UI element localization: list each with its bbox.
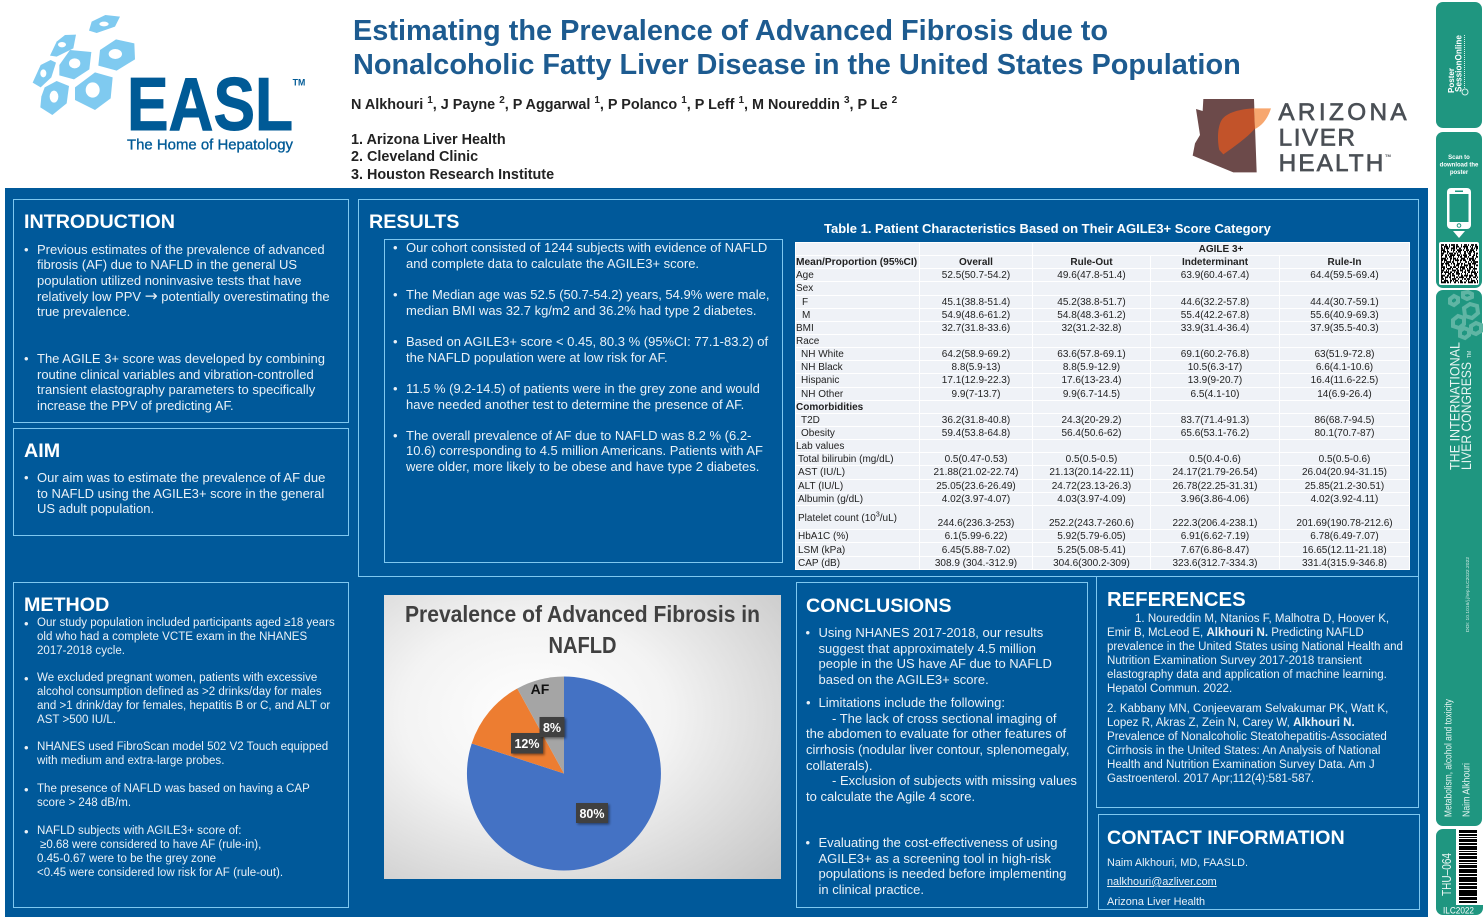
heading: contact information: CONTACT INFORMATION (1107, 827, 1345, 849)
congress name: THE INTERNATIONAL (1448, 342, 1462, 470)
table: patient characteristics: 5.92(5.79-6.05) (1057, 531, 1126, 542)
panel: method: • (24, 671, 29, 686)
bullet text: study population: old who had a complete VCTE exam in the NHANES (37, 631, 307, 643)
bullet text: limitations: - The lack of cross sectional imaging of (832, 711, 1056, 726)
table: patient characteristics: 0.5(0.4-0.6) (1189, 454, 1241, 465)
table: patient characteristics: 16.4(11.6-22.5) (1311, 375, 1378, 386)
bullet text: overall prevalence (393, 428, 763, 474)
logo text: Arizona: ARIZONA (1278, 99, 1407, 126)
bullet text: exclusions: and >1 drink/day for females, hepatitis B or C, and ALT or (37, 700, 330, 712)
reference 1 (1107, 613, 1403, 695)
panel: method: • (24, 824, 29, 839)
bullet text: CAP definition (24, 782, 310, 809)
congress name (1448, 342, 1474, 470)
table: patient characteristics: 83.7(71.4-91.3) (1181, 415, 1249, 426)
bullet text: limitations: • (806, 695, 811, 710)
panel: aim (13, 428, 349, 536)
data label: 8% (540, 717, 564, 737)
bullet text: AGILE 3+ development (24, 351, 325, 413)
table: patient characteristics: 65.6(53.1-76.2) (1181, 428, 1249, 439)
data label: 12% (511, 733, 543, 754)
table: patient characteristics: AST (IU/L) (798, 467, 845, 478)
bullet text: limitations: Limitations include the following: (818, 695, 1005, 710)
table: patient characteristics: 26.78(22.25-31.31) (1172, 481, 1258, 492)
panel: results findings box (384, 239, 783, 563)
presenter: Naim Alkhouri (1462, 763, 1472, 817)
sidebar (1436, 2, 1483, 916)
table: patient characteristics: 49.6(47.8-51.4) (1057, 270, 1126, 281)
table: patient characteristics: 4.02(3.97-4.07) (942, 494, 1010, 505)
table: patient characteristics: 26.04(20.94-31.15) (1302, 467, 1387, 478)
table: patient characteristics: Total bilirubin (mg/dL) (798, 454, 894, 465)
table: patient characteristics: NH White (801, 349, 844, 360)
table: patient characteristics: 32(31.2-32.8) (1061, 323, 1122, 334)
table: patient characteristics: F (802, 297, 808, 308)
bullet text: demographics: The Median age was 52.5 (50.7-54.2) years, 54.9% were male, (406, 287, 769, 302)
table: patient characteristics: 25.05(23.6-26.49) (936, 481, 1016, 492)
reference 1: Nutrition Examination Survey 2017-2018 transient (1107, 655, 1362, 667)
table: patient characteristics: 304.6(300.2-309) (1053, 558, 1130, 569)
reference 1: prevalence in the United States using National Health and (1107, 641, 1403, 653)
table: patient characteristics: 6.91(6.62-7.19) (1181, 531, 1249, 542)
table: patient characteristics: ALT (IU/L) (798, 481, 843, 492)
icon: liver (1218, 108, 1271, 154)
reference 2: Gastroenterol. 2017 Apr;112(4):581-587. (1107, 772, 1314, 784)
bullet text: AGILE3+ cutoffs: ≥0.68 were considered to have AF (rule-in), (40, 839, 261, 851)
contact email: nalkhouri@azliver.com (1107, 876, 1217, 888)
table: patient characteristics: 3.96(3.86-4.06) (1181, 494, 1249, 505)
table: patient characteristics: Indeterminant (1182, 257, 1248, 268)
bullet text: AGILE3+ cutoffs: 0.45-0.67 were to be the grey zone (37, 853, 216, 865)
chart title: NAFLD (548, 632, 616, 658)
table: patient characteristics: 6.5(4.1-10) (1191, 389, 1239, 400)
heading: results: RESULTS (369, 211, 459, 233)
table: patient characteristics: T2D (801, 415, 820, 426)
session topic: Metabolism, alcohol and toxicity (1444, 699, 1454, 817)
bullet text: exclusions: We excluded pregnant women, patients with excessive (37, 672, 317, 684)
table: patient characteristics: 59.4(53.8-64.8) (942, 428, 1010, 439)
bullet text: cost-effectiveness (806, 835, 1066, 897)
table: patient characteristics: 17.1(12.9-22.3) (942, 375, 1010, 386)
bullet text: AGILE3+ cutoffs: <0.45 were considered low risk for AF (rule-out). (37, 867, 283, 879)
bullet text: AGILE 3+ development: increase the PPV of predicting AF. (37, 398, 234, 413)
panel: results findings box: • (393, 240, 398, 255)
congress name: TM (1467, 351, 1473, 358)
bullet text: cohort: and complete data to calculate the AGILE3+ score. (406, 256, 699, 271)
congress name: LIVER CONGRESS (1459, 362, 1474, 470)
data label: 8%: 8% (543, 721, 561, 735)
reference 1: Hepatol Commun. 2022. (1107, 683, 1232, 695)
data label: 80% (576, 803, 608, 823)
table: patient characteristics: 63.6(57.8-69.1) (1057, 349, 1126, 360)
panel: results findings box: • (393, 287, 398, 302)
barcode (1459, 830, 1477, 904)
panel: introduction (13, 199, 349, 423)
table: patient characteristics: 45.2(38.8-51.7) (1057, 297, 1126, 308)
table: patient characteristics: 21.88(21.02-22.74) (933, 467, 1019, 478)
panel: results findings box: • (393, 381, 398, 396)
reference 2: Health and Nutrition Examination Survey Data. Am J (1107, 758, 1375, 770)
panel: method: • (24, 740, 29, 755)
table: patient characteristics: 64.4(59.5-69.4) (1310, 270, 1379, 281)
table: patient characteristics: 16.65(12.11-21.18) (1302, 545, 1387, 556)
contact name: Naim Alkhouri, MD, FAASLD. (1107, 857, 1248, 869)
table: patient characteristics: 54.8(48.3-61.2) (1057, 310, 1126, 321)
bullet text: exclusions (24, 671, 330, 726)
table: patient characteristics: 7.67(6.86-8.47) (1181, 545, 1249, 556)
panel: references (1096, 576, 1419, 808)
table: patient characteristics: 64.2(58.9-69.2) (942, 349, 1010, 360)
bullet text: cohort: Our cohort consisted of 1244 subjects with evidence of NAFLD (406, 240, 767, 255)
table: patient characteristics: 21.13(20.14-22.11) (1049, 467, 1134, 478)
table: patient characteristics: 36.2(31.8-40.8) (942, 415, 1010, 426)
table: patient characteristics: 6.78(6.49-7.07) (1310, 531, 1379, 542)
panel: introduction: • (24, 351, 29, 366)
data label: 80%: 80% (579, 807, 605, 821)
bullet text: study population (24, 616, 335, 657)
bullet text: prior estimates: relatively low PPV → potentially overestimating the (37, 287, 330, 305)
bullet text: prior estimates: fibrosis (AF) due to NAFLD in the general US (37, 257, 297, 272)
table: patient characteristics: Mean/Proportion (95%CI) (796, 257, 917, 268)
bullet text: low risk: Based on AGILE3+ score < 0.45, 80.3 % (95%CI: 77.1-83.2) of (406, 334, 768, 349)
table: patient characteristics: 4.02(3.92-4.11) (1311, 494, 1378, 505)
heading: conclusions: CONCLUSIONS (806, 595, 951, 617)
trademark: TM (293, 77, 305, 87)
scan caption: poster (1450, 170, 1469, 176)
bullet text: main finding: people in the US have AF due to NAFLD (818, 656, 1052, 671)
bullet text: exclusions: AST >500 IU/L. (37, 714, 116, 726)
bullet text: grey zone (393, 381, 760, 412)
bullet text: CAP definition: The presence of NAFLD was based on having a CAP (37, 783, 310, 795)
table: patient characteristics: 52.5(50.7-54.2) (942, 270, 1010, 281)
table: patient characteristics: Lab values (796, 441, 844, 452)
table: patient characteristics: 201.69(190.78-212.6) (1296, 518, 1393, 529)
tagline: The Home of Hepatology (127, 137, 294, 153)
table: patient characteristics: 10.5(6.3-17) (1188, 362, 1242, 373)
bullet text: limitations: collaterals). (806, 758, 872, 773)
poster ID: THU–064 (1440, 853, 1454, 896)
panel: results findings box: • (393, 334, 398, 349)
bullet text: grey zone: 11.5 % (9.2-14.5) of patients were in the grey zone and would (406, 381, 760, 396)
bullet text: main finding: suggest that approximately 4.5 million (818, 641, 1036, 656)
table: patient characteristics: Obesity (801, 428, 835, 439)
reference 2: 2. Kabbany MN, Conjeevaram Selvakumar PK, Watt K, (1107, 702, 1388, 714)
sidebar: congress block (1436, 290, 1482, 826)
table: patient characteristics: 331.4(315.9-346.8) (1302, 558, 1387, 569)
table: patient characteristics: BMI (796, 323, 814, 334)
bullet text: CAP definition: score > 248 dB/m. (37, 797, 131, 809)
table: patient characteristics: 69.1(60.2-76.8) (1181, 349, 1249, 360)
bullet text: FibroScan (24, 740, 328, 767)
bullet text: AGILE 3+ development: transient elastography parameters to specifically (37, 382, 315, 397)
table: patient characteristics (795, 242, 1410, 570)
bullet text: AGILE3+ cutoffs: NAFLD subjects with AGILE3+ score of: (37, 825, 241, 837)
pie slices (467, 676, 661, 870)
logo text: Health: HEALTH (1279, 150, 1383, 177)
table: patient characteristics: 33.9(31.4-36.4) (1181, 323, 1249, 334)
table: patient characteristics: 323.6(312.7-334.3) (1172, 558, 1258, 569)
table: patient characteristics: 54.9(48.6-61.2) (942, 310, 1010, 321)
table: patient characteristics: 37.9(35.5-40.3) (1310, 323, 1379, 334)
table: patient characteristics: 63.9(60.4-67.4) (1181, 270, 1249, 281)
table: patient characteristics: 6.45(5.88-7.02) (942, 545, 1010, 556)
Arizona Liver Health logo (1192, 99, 1407, 177)
congress code: ILC2022 (1443, 906, 1474, 916)
bullet text: cost-effectiveness: in clinical practice. (818, 882, 924, 897)
scan caption (1440, 155, 1479, 176)
table: patient characteristics: Age (796, 270, 814, 281)
table: patient characteristics: 55.6(40.9-69.3) (1310, 310, 1379, 321)
table: patient characteristics: 32.7(31.8-33.6) (942, 323, 1010, 334)
bullet text: grey zone: have needed another test to determine the presence of AF. (406, 397, 744, 412)
icon: down arrow (1453, 231, 1465, 238)
bullet text: limitations: cirrhosis (nodular liver contour, splenomegaly, (806, 742, 1070, 757)
sidebar: poster session block: Poster (1446, 67, 1456, 93)
bullet text: main finding (806, 625, 1052, 687)
table: patient characteristics: 9.9(6.7-14.5) (1063, 389, 1120, 400)
panel: conclusions: • (806, 625, 810, 640)
hexagon watermark (1450, 292, 1481, 338)
affiliations: 3. Houston Research Institute (351, 166, 554, 182)
table: patient characteristics: 4.03(3.97-4.09) (1057, 494, 1126, 505)
panel: method: • (24, 782, 29, 797)
reference 1: Emir B, McLeod E, Alkhouri N. Predicting NAFLD (1107, 627, 1364, 639)
bullet text: FibroScan: NHANES used FibroScan model 502 V2 Touch equipped (37, 741, 328, 753)
table: patient characteristics: 8.8(5.9-12.9) (1063, 362, 1120, 373)
panel: method: • (24, 616, 29, 631)
panel: results (358, 199, 1419, 577)
reference 2: Lopez R, Akras Z, Zein N, Carey W, Alkhouri N. (1107, 716, 1355, 728)
table: patient characteristics: NH Other (801, 389, 843, 400)
table: patient characteristics: CAP (dB) (798, 558, 840, 569)
data label: 12%: 12% (514, 737, 540, 751)
bullet text: overall prevalence: were older, more likely to be obese and have type 2 diabetes. (406, 459, 759, 474)
table: patient characteristics: 55.4(42.2-67.8) (1181, 310, 1249, 321)
label: AF: AF (531, 681, 550, 697)
table: patient characteristics: 9.9(7-13.7) (952, 389, 1000, 400)
table: patient characteristics: Hispanic (801, 375, 839, 386)
table: patient characteristics: Comorbidities (796, 402, 863, 413)
table: patient characteristics: Rule-In (1328, 257, 1361, 268)
bullet text: aim: Our aim was to estimate the prevalence of AF due (37, 470, 325, 485)
table: patient characteristics: 0.5(0.47-0.53) (945, 454, 1007, 465)
bullet text: low risk: the NAFLD population were at low risk for AF. (406, 350, 668, 365)
table: patient characteristics: 8.8(5.9-13) (952, 362, 1000, 373)
table: patient characteristics: 24.3(20-29.2) (1061, 415, 1122, 426)
scan caption: Scan to (1448, 155, 1470, 161)
panel: results findings box: • (393, 428, 398, 442)
bullet text: aim: US adult population. (37, 501, 154, 516)
table: patient characteristics: Platelet count (103/uL) (798, 511, 897, 524)
table: patient characteristics: NH Black (801, 362, 843, 373)
bullet text: study population: Our study population included participants aged ≥18 years (37, 617, 335, 629)
table: patient characteristics: 252.2(243.7-260.6) (1049, 518, 1134, 529)
wordmark: EASL: EASL (127, 62, 293, 146)
affiliations: 2. Cleveland Clinic (351, 149, 478, 165)
bullet text: overall prevalence: 10.6) corresponding to 4.5 million Americans. Patients with AF (406, 443, 763, 458)
heading: introduction: INTRODUCTION (24, 211, 175, 233)
bullet text: cost-effectiveness: Evaluating the cost-effectiveness of using (818, 835, 1057, 850)
panel: method (13, 582, 349, 908)
bullet text: AGILE 3+ development: routine clinical variables and vibration-controlled (37, 367, 314, 382)
main blue background panel (5, 188, 1428, 917)
bullet text: aim: to NAFLD using the AGILE3+ score in the general (37, 486, 324, 501)
sidebar: poster session block (1436, 2, 1482, 128)
table: patient characteristics: 24.17(21.79-26.54) (1172, 467, 1258, 478)
bullet text: limitations (806, 695, 1077, 804)
table: patient characteristics: 308.9 (304.-312.9) (935, 558, 1017, 569)
table: patient characteristics: 13.9(9-20.7) (1188, 375, 1242, 386)
QR code (1439, 242, 1479, 285)
icon: phone (1447, 188, 1471, 229)
table: patient characteristics: M (802, 310, 810, 321)
bullet text: aim (24, 470, 325, 516)
chart title (405, 601, 760, 658)
bullet text: demographics (393, 287, 769, 318)
table: patient characteristics: 44.6(32.2-57.8) (1181, 297, 1249, 308)
table: patient characteristics: 0.5(0.5-0.6) (1319, 454, 1370, 465)
panel: contact information (1098, 814, 1420, 910)
logo text: Liver: LIVER (1279, 125, 1355, 152)
reference 2: Prevalence of Nonalcoholic Steatohepatitis-Associated (1107, 730, 1387, 742)
bullet text: AGILE3+ cutoffs (24, 824, 283, 879)
table: patient characteristics: Rule-Out (1070, 257, 1113, 268)
sidebar: QR download block (1436, 132, 1482, 288)
EASL logo (32, 15, 305, 153)
affiliations: 1. Arizona Liver Health (351, 132, 506, 148)
bullet text: prior estimates: population utilized noninvasive tests that have (37, 273, 302, 288)
table: patient characteristics: 14(6.9-26.4) (1317, 389, 1372, 400)
bullet text: prior estimates: true prevalence. (37, 304, 130, 319)
bullet text: low risk (393, 334, 768, 365)
table: patient characteristics: 244.6(236.3-253) (938, 518, 1014, 529)
table: patient characteristics: 222.3(206.4-238.1) (1172, 518, 1258, 529)
contact organisation: Arizona Liver Health (1107, 896, 1205, 908)
bullet text: limitations: - Exclusion of subjects with missing values (832, 773, 1077, 788)
panel: conclusions (796, 582, 1088, 908)
bullet text: exclusions: alcohol consumption defined as >2 drinks/day for males (37, 686, 322, 698)
table: patient characteristics: 5.25(5.08-5.41) (1057, 545, 1126, 556)
bullet text: cost-effectiveness: AGILE3+ as a screening tool in high-risk (818, 851, 1051, 866)
bullet text: cohort (393, 240, 767, 271)
reference 2 (1107, 702, 1388, 784)
table: patient characteristics: 25.85(21.2-30.51) (1305, 481, 1384, 492)
table: patient characteristics: AGILE 3+ (1199, 244, 1243, 255)
bullet text: prior estimates: Previous estimates of the prevalence of advanced (37, 242, 325, 257)
reference 1: elastography data and application of machine learning. (1107, 669, 1387, 681)
panel: introduction: • (24, 242, 29, 257)
bullet text: main finding: based on the AGILE3+ score. (818, 672, 989, 687)
table: patient characteristics: HbA1C (%) (798, 531, 849, 542)
bullet text: prior estimates (24, 242, 330, 319)
title (353, 15, 1241, 81)
panel: conclusions: • (806, 835, 810, 850)
table: patient characteristics: 6.1(5.99-6.22) (945, 531, 1007, 542)
table: patient characteristics: Albumin (g/dL) (798, 494, 863, 505)
pie chart: prevalence of advanced fibrosis (384, 595, 781, 879)
sidebar: poster ID and barcode block (1436, 829, 1483, 916)
table: patient characteristics: 45.1(38.8-51.4) (942, 297, 1010, 308)
table: patient characteristics: Overall (959, 257, 993, 268)
table: patient characteristics: Sex (796, 283, 813, 294)
table: patient characteristics: LSM (kPa) (798, 545, 845, 556)
bullet text: demographics: median BMI was 32.7 kg/m2 and 36.2% had type 2 diabetes. (406, 303, 756, 318)
table: patient characteristics: 6.6(4.1-10.6) (1316, 362, 1373, 373)
table: patient characteristics: 44.4(30.7-59.1) (1310, 297, 1379, 308)
bullet text: FibroScan: with medium and extra-large probes. (37, 755, 224, 767)
table: patient characteristics: 86(68.7-94.5) (1314, 415, 1375, 426)
table: patient characteristics: 24.72(23.13-26.3) (1052, 481, 1131, 492)
icon: hexagon cells (33, 15, 135, 115)
table: patient characteristics: 56.4(50.6-62) (1061, 428, 1122, 439)
authors: N Alkhouri 1, J Payne 2, P Aggarwal 1, P Polanco 1, P Leff 1, M Noureddin 3, P Le 2 (351, 95, 897, 113)
heading: references: REFERENCES (1107, 589, 1246, 611)
scan caption: download the (1440, 162, 1479, 168)
bullet text: main finding: Using NHANES 2017-2018, our results (818, 625, 1043, 640)
bullet text: overall prevalence: The overall prevalence of AF due to NAFLD was 8.2 % (6.2- (406, 428, 751, 442)
table: patient characteristics: 80.1(70.7-87) (1314, 428, 1375, 439)
panel: aim: • (24, 470, 29, 485)
title: Estimating the Prevalence of Advanced Fibrosis due to (353, 15, 1108, 47)
bullet text: AGILE 3+ development: The AGILE 3+ score was developed by combining (37, 351, 325, 366)
table: patient characteristics: 63(51.9-72.8) (1314, 349, 1375, 360)
table: patient characteristics: 0.5(0.5-0.5) (1066, 454, 1117, 465)
bullet text: limitations: to calculate the Agile 4 score. (806, 789, 975, 804)
heading: method: METHOD (24, 594, 109, 616)
sidebar: poster session block: SessionOnline (1454, 35, 1464, 92)
bullet text: limitations: the abdomen to evaluate for other features of (806, 726, 1066, 741)
bullet text: study population: 2017-2018 cycle. (37, 645, 125, 657)
table: patient characteristics: 17.6(13-23.4) (1061, 375, 1122, 386)
heading: aim: AIM (24, 440, 60, 462)
title: Nonalcoholic Fatty Liver Disease in the United States Population (353, 49, 1241, 81)
table title: Table 1. Patient Characteristics Based on Their AGILE3+ Score Category (824, 221, 1271, 236)
DOI: DOI: 10.1016/j.jhep.ILC2022.2022 (1465, 556, 1470, 632)
reference 2: Cirrhosis in the United States: An Analysis of National (1107, 744, 1380, 756)
icon: Arizona state silhouette (1193, 99, 1257, 172)
affiliations (351, 132, 554, 182)
table: patient characteristics: Race (796, 336, 819, 347)
reference 1: 1. Noureddin M, Ntanios F, Malhotra D, Hoover K, (1135, 613, 1389, 625)
bullet text: cost-effectiveness: populations is needed before implementing (818, 866, 1066, 881)
logo trademark: TM (1385, 153, 1391, 158)
